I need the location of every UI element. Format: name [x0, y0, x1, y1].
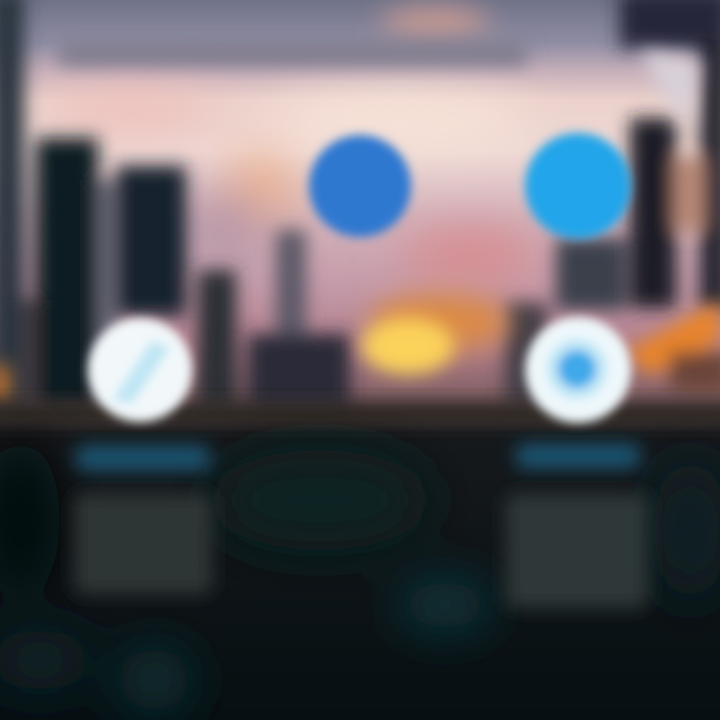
pink cloud at top: [380, 8, 490, 36]
sunset clouds: [40, 90, 540, 281]
heading band at top of sky: [58, 42, 528, 66]
right column heading: [516, 444, 640, 468]
left column body text: [74, 494, 212, 594]
icon: white circle with blue centre: [525, 317, 631, 423]
icon: cyan circle: [525, 133, 631, 239]
horizon shadow: [0, 402, 720, 426]
right column body text: [506, 494, 648, 608]
glowing sun: [362, 294, 510, 374]
left column heading: [76, 446, 210, 470]
icon: white circle with diagonal mark: [88, 318, 192, 422]
skyline buildings: [0, 0, 720, 410]
dark tones in lower area: [0, 440, 720, 712]
orange light streak: [0, 300, 720, 405]
panel: left text column: [74, 446, 212, 594]
panel: right text column: [506, 444, 648, 608]
light diagonal glare top right: [640, 50, 700, 130]
icon: blue circle: [309, 135, 411, 237]
